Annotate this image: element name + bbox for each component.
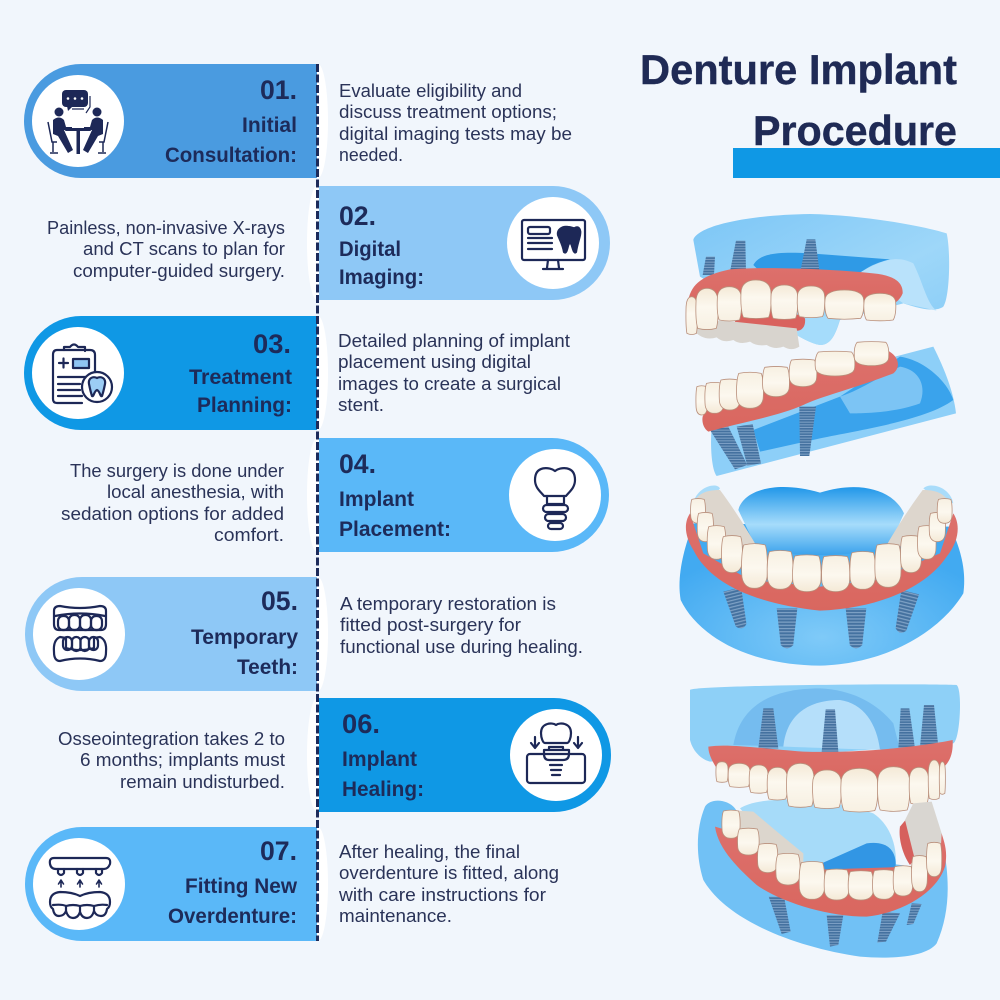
text: step 02 description: computer-guided surgery. — [73, 261, 285, 281]
panel: step 07 fitting new overdenture: Overdenture: — [168, 905, 297, 928]
text: step 03 description: images to create a surgical — [338, 374, 561, 394]
icon: implant into jaw — [527, 724, 585, 783]
icon: implant with crown — [535, 468, 575, 529]
icon: monitor with tooth — [522, 220, 585, 269]
panel: step 07 fitting new overdenture: Fitting New — [185, 875, 298, 898]
text: step 03 description: stent. — [338, 395, 384, 415]
text: step 01 description: digital imaging tests may be — [339, 124, 572, 144]
text: step 04 description: comfort. — [214, 525, 284, 545]
text: step 06 description — [58, 729, 285, 792]
text: step 07 description: with care instructions for — [338, 885, 546, 905]
text: step 04 description: local anesthesia, with — [107, 482, 284, 502]
panel: step 04 implant placement: 04. — [339, 449, 376, 479]
text: step 02 description — [47, 218, 285, 281]
panel: step 01 initial consultation — [24, 64, 328, 178]
panel: step 07 fitting new overdenture: 07. — [260, 836, 297, 866]
text: step 02 description: and CT scans to plan for — [83, 239, 285, 259]
text: step 07 description: overdenture is fitted, along — [339, 863, 559, 883]
text: step 04 description: The surgery is done under — [70, 461, 284, 481]
text: step 05 description — [340, 594, 583, 657]
panel: step 01 initial consultation: Consultation: — [165, 144, 297, 167]
panel: step 03 treatment planning: 03. — [253, 329, 291, 359]
illustration: open view of upper and lower implant dentures — [690, 684, 960, 958]
panel: step 04 implant placement: Implant — [339, 488, 414, 511]
text: step 07 description: maintenance. — [339, 906, 452, 926]
text: step 05 description: functional use during healing. — [340, 637, 583, 657]
panel: step 05 temporary teeth — [25, 577, 328, 691]
panel: step 06 implant healing: Healing: — [342, 778, 424, 801]
panel: step 03 treatment planning: Planning: — [197, 394, 292, 417]
icon: clipboard with tooth — [53, 344, 112, 403]
panel: step 06 implant healing: 06. — [342, 709, 380, 739]
text: step 02 description: Painless, non-invasive X-rays — [47, 218, 285, 238]
title: Procedure — [753, 107, 957, 154]
icon: overdenture on implants — [50, 858, 110, 918]
title: Denture Implant — [640, 46, 957, 93]
text: step 01 description: needed. — [339, 145, 403, 165]
text: step 05 description: fitted post-surgery for — [340, 615, 521, 635]
panel: step 01 initial consultation: 01. — [260, 75, 297, 105]
illustration: front view of lower implant denture — [679, 485, 964, 666]
panel: step 03 treatment planning — [24, 316, 328, 430]
panel: step 01 initial consultation: Initial — [242, 114, 297, 137]
panel: step 03 treatment planning: Treatment — [189, 366, 292, 389]
panel: step 06 implant healing — [307, 698, 611, 812]
text: step 01 description: Evaluate eligibility and — [339, 81, 522, 101]
panel: step 04 implant placement — [307, 438, 609, 552]
text: step 05 description: A temporary restoration is — [340, 594, 556, 614]
text: step 06 description: Osseointegration takes 2 to — [58, 729, 285, 749]
text: step 04 description: sedation options for added — [61, 504, 284, 524]
panel: step 06 implant healing: Implant — [342, 748, 417, 771]
text: step 07 description: After healing, the final — [339, 842, 520, 862]
text: step 01 description: discuss treatment options; — [339, 102, 557, 122]
dashed timeline — [316, 64, 319, 941]
panel: step 05 temporary teeth: Teeth: — [237, 656, 298, 679]
icon: consultation at table — [48, 90, 108, 154]
panel: step 02 digital imaging: Imaging: — [339, 266, 424, 289]
text: step 06 description: 6 months; implants must — [80, 750, 285, 770]
panel: step 04 implant placement: Placement: — [339, 518, 451, 541]
text: step 06 description: remain undisturbed. — [120, 772, 285, 792]
title accent bar — [733, 148, 1000, 178]
text: step 03 description: Detailed planning of implant — [338, 331, 570, 351]
text: step 01 description — [339, 81, 572, 165]
panel: step 07 fitting new overdenture — [25, 827, 328, 941]
title — [640, 46, 957, 154]
panel: step 05 temporary teeth: 05. — [261, 586, 298, 616]
text: step 03 description — [338, 331, 570, 415]
illustration: side view of upper and lower implant dentures — [686, 214, 956, 476]
text: step 04 description — [61, 461, 284, 545]
panel: step 02 digital imaging: 02. — [339, 201, 376, 231]
text: step 03 description: placement using digital — [338, 352, 531, 372]
panel: step 02 digital imaging: Digital — [339, 238, 401, 261]
text: step 07 description — [338, 842, 559, 926]
panel: step 05 temporary teeth: Temporary — [191, 626, 298, 649]
panel: step 02 digital imaging — [307, 186, 610, 300]
icon: denture set — [54, 606, 106, 661]
